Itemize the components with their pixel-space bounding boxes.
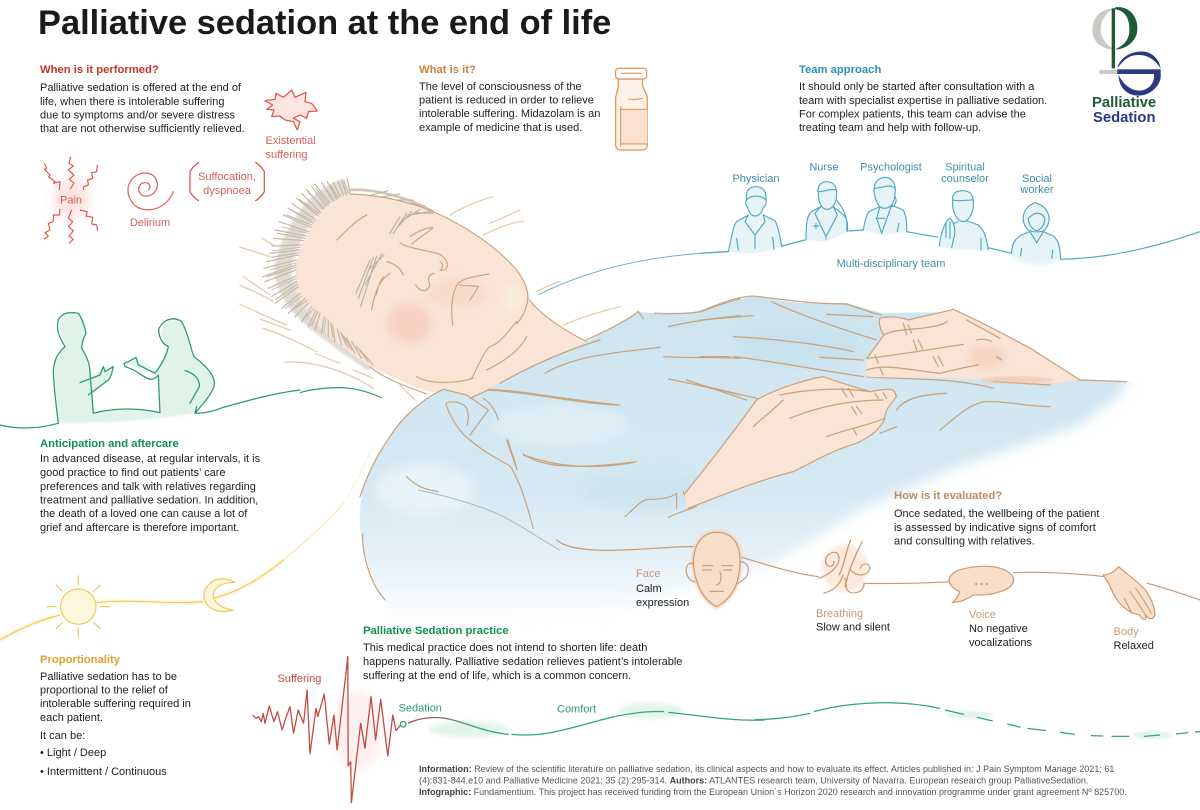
icon: medicine vial	[616, 68, 647, 150]
icon: breathing: Slow and silent	[816, 622, 890, 634]
icon: spiritual counselor: Spiritual	[945, 162, 985, 174]
logo: Palliative Sedation: Sedation	[1093, 110, 1155, 126]
panel: anticipation and aftercare: Anticipation and aftercare	[40, 438, 179, 450]
title: Palliative sedation at the end of life	[38, 4, 611, 42]
illustration: patient head	[263, 178, 587, 397]
icon: sun and moon on yellow line	[0, 447, 373, 640]
panel: how is it evaluated: Once sedated, the wellbeing of the patient	[894, 508, 1099, 520]
icon: nurse	[806, 162, 848, 242]
icon: relaxed hand: Relaxed	[1114, 640, 1154, 652]
panel: what is it: example of medicine that is used.	[419, 122, 582, 134]
panel: what is it: What is it?	[419, 64, 476, 76]
panel: how is it evaluated: and consulting with relatives.	[894, 536, 1035, 548]
icon: breathing	[816, 540, 890, 634]
panel: anticipation and aftercare: good practice to find out patients’ care	[40, 467, 226, 479]
illustration: gown and blanket	[359, 295, 1131, 604]
panel: how is it evaluated	[894, 490, 1099, 548]
panel: team approach	[799, 64, 1047, 134]
icon: spiritual counselor: counselor	[941, 173, 989, 185]
icon: existential suffering: Existential	[266, 135, 316, 147]
panel: proportionality: each patient.	[40, 712, 103, 724]
panel: palliative sedation practice: Palliative Sedation practice	[363, 625, 509, 637]
illustration: upper hand	[866, 309, 1080, 383]
panel: palliative sedation practice: This medical practice does not intend to shorten life: death	[363, 642, 647, 654]
hair grey highlights	[270, 186, 346, 345]
panel: proportionality: Palliative sedation has to be	[40, 671, 177, 683]
illustration: lower hand	[685, 377, 897, 508]
panel: palliative sedation practice: suffering at the end of life, which is a common concern.	[363, 670, 631, 682]
panel: when is it performed: When is it performed?	[40, 64, 159, 76]
icon: face: expression	[636, 597, 689, 609]
panel: how is it evaluated: is assessed by indicative signs of comfort	[894, 522, 1096, 534]
panel: proportionality: intolerable suffering required in	[40, 698, 191, 710]
panel: how is it evaluated: How is it evaluated?	[894, 490, 1002, 502]
icon: physician	[728, 173, 782, 253]
icon: psychologist: Psychologist	[860, 162, 922, 174]
panel: proportionality: • Light / Deep	[40, 747, 106, 759]
footer: sources and credits	[419, 764, 1127, 797]
icon: voice: Voice	[969, 609, 996, 621]
panel: palliative sedation practice	[363, 625, 682, 682]
panel: palliative sedation practice: happens naturally. Palliative sedation relieves patient’s intolerable	[363, 656, 682, 668]
panel: proportionality: • Intermittent / Continuous	[40, 766, 167, 778]
footer: sources and credits: Infographic: Fundamentium. This project has received funding from the European Union´s Horizon 2020 research and innovation programme under grant agreement Nº 825700.	[419, 787, 1127, 797]
panel: what is it: The level of consciousness of the	[419, 81, 582, 93]
icon: relaxed hand: Body	[1114, 626, 1139, 638]
icon: psychologist	[860, 162, 922, 235]
icon: breathing: Breathing	[816, 608, 863, 620]
icon: face: Face	[636, 568, 660, 580]
panel: team approach: Team approach	[799, 64, 881, 76]
panel: when is it performed	[40, 64, 245, 135]
chart: comfort line: Comfort	[557, 704, 596, 716]
panel: anticipation and aftercare: the death of a loved one can cause a lot of	[40, 508, 248, 520]
footer: sources and credits: (4):831-844.e10 and Palliative Medicine 2021; 35 (2):295-314. Authors: ATLANTES research team, University of Navarra. European research group PalliativeSedation.	[419, 776, 1088, 786]
chart: comfort line: Sedation	[398, 702, 442, 714]
panel: proportionality	[40, 654, 191, 778]
panel: proportionality: Proportionality	[40, 654, 121, 666]
panel: team approach: For complex patients, this team can advise the	[799, 108, 1026, 120]
panel: anticipation and aftercare: grief and aftercare is therefore important.	[40, 522, 239, 534]
panel: anticipation and aftercare: treatment and palliative sedation. In addition,	[40, 494, 258, 506]
icon: suffocation, dyspnoea	[190, 162, 264, 201]
panel: when is it performed: that are not otherwise sufficiently relieved.	[40, 123, 245, 135]
panel: anticipation and aftercare: preferences and talk with relatives regarding	[40, 481, 256, 493]
icon: social worker	[1012, 173, 1061, 265]
chart: comfort line	[398, 702, 1200, 739]
panel: proportionality: It can be:	[40, 730, 85, 742]
panel: team approach: treating team and help with follow-up.	[799, 122, 981, 134]
logo: Palliative Sedation: Palliative	[1092, 95, 1156, 111]
icon: existential suffering	[265, 90, 317, 161]
footer: sources and credits: Information: Review of the scientific literature on palliative sedation, its clinical aspects and how to evaluate its effect. Articles published in: J Pain Symptom Manage 2021; 61	[419, 764, 1114, 774]
panel: when is it performed: due to symptoms and/or severe distress	[40, 110, 236, 122]
panel: when is it performed: life, when there is intolerable suffering	[40, 96, 224, 108]
panel: anticipation and aftercare: In advanced disease, at regular intervals, it is	[40, 453, 261, 465]
icon: suffocation, dyspnoea: Suffocation,	[198, 171, 256, 183]
panel: team approach: It should only be started after consultation with a	[799, 81, 1035, 93]
logo: Palliative Sedation	[1092, 7, 1161, 126]
icon: pain: Pain	[60, 194, 82, 206]
icon: delirium	[128, 173, 173, 229]
icon: voice: vocalizations	[969, 637, 1032, 649]
panel: proportionality: proportional to the relief of	[40, 684, 169, 696]
icon: face	[636, 532, 748, 609]
chart: suffering waveform	[252, 657, 401, 803]
icon: delirium: Delirium	[130, 217, 170, 229]
icon: voice: No negative	[969, 623, 1028, 635]
icon: spiritual counselor	[939, 162, 989, 250]
panel: when is it performed: Palliative sedation is offered at the end of	[40, 82, 242, 94]
icon: suffocation, dyspnoea: dyspnoea	[203, 185, 252, 197]
face lines	[337, 194, 587, 394]
chart: brown line	[557, 540, 1200, 600]
hair strokes	[263, 178, 425, 365]
label: multi-disciplinary team: Multi-disciplinary team	[837, 258, 945, 270]
icon: existential suffering: suffering	[266, 149, 308, 161]
icon: two people talking	[0, 312, 300, 428]
chart: suffering waveform: Suffering	[278, 673, 321, 685]
panel: what is it: patient is reduced in order to relieve	[419, 94, 594, 106]
panel: anticipation and aftercare	[40, 438, 261, 534]
icon: relaxed hand	[1103, 567, 1155, 652]
icon: social worker: worker	[1019, 184, 1054, 196]
chart: green line	[300, 388, 382, 398]
icon: physician: Physician	[732, 173, 780, 185]
icon: social worker: Social	[1022, 173, 1052, 185]
eyebrows	[356, 209, 433, 307]
chart: multi-disciplinary team line	[538, 230, 1200, 295]
icon: voice	[949, 566, 1032, 649]
icon: face: Calm	[636, 583, 662, 595]
icon: pain	[44, 157, 98, 243]
panel: team approach: team with specialist expertise in palliative sedation.	[799, 95, 1047, 107]
illustration: pillow lines	[240, 197, 620, 400]
panel: what is it	[419, 64, 600, 134]
panel: what is it: intolerable suffering. Midazolam is an	[419, 108, 600, 120]
icon: nurse: Nurse	[809, 162, 839, 174]
